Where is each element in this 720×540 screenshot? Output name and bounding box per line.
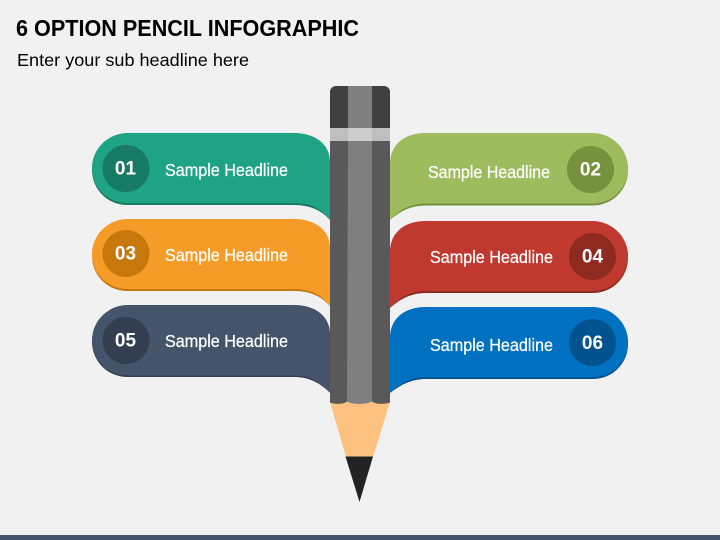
banner 02: Sample Headline: [428, 162, 550, 182]
pencil wood cone: [330, 402, 390, 457]
title: 6 OPTION PENCIL INFOGRAPHIC: [16, 15, 359, 41]
banner 04: 04: [582, 247, 603, 268]
banner 05: [92, 305, 330, 393]
pencil ferrule band: [330, 128, 390, 141]
banner 05: 05: [115, 331, 136, 352]
footer bar: [0, 535, 720, 540]
banner 04: Sample Headline: [430, 247, 553, 267]
pencil body: [330, 141, 390, 404]
banner 03: Sample Headline: [165, 245, 288, 265]
banner 01: 01: [115, 158, 136, 180]
pencil eraser cap: [330, 86, 390, 128]
banner 03: [92, 219, 330, 306]
banner 05: Sample Headline: [165, 331, 288, 351]
banner 04: [390, 221, 628, 308]
banner 02: [390, 133, 628, 220]
banner 02: 02: [580, 160, 601, 181]
banner 01: [92, 133, 330, 220]
banner 03: 03: [115, 244, 136, 264]
pencil: [330, 86, 390, 502]
banner 01: Sample Headline: [165, 160, 288, 180]
subtitle: Enter your sub headline here: [17, 50, 249, 70]
banner 06: Sample Headline: [430, 335, 553, 355]
banner 06: [390, 307, 628, 393]
banner 06: 06: [582, 333, 603, 354]
pencil graphite tip: [346, 456, 373, 502]
